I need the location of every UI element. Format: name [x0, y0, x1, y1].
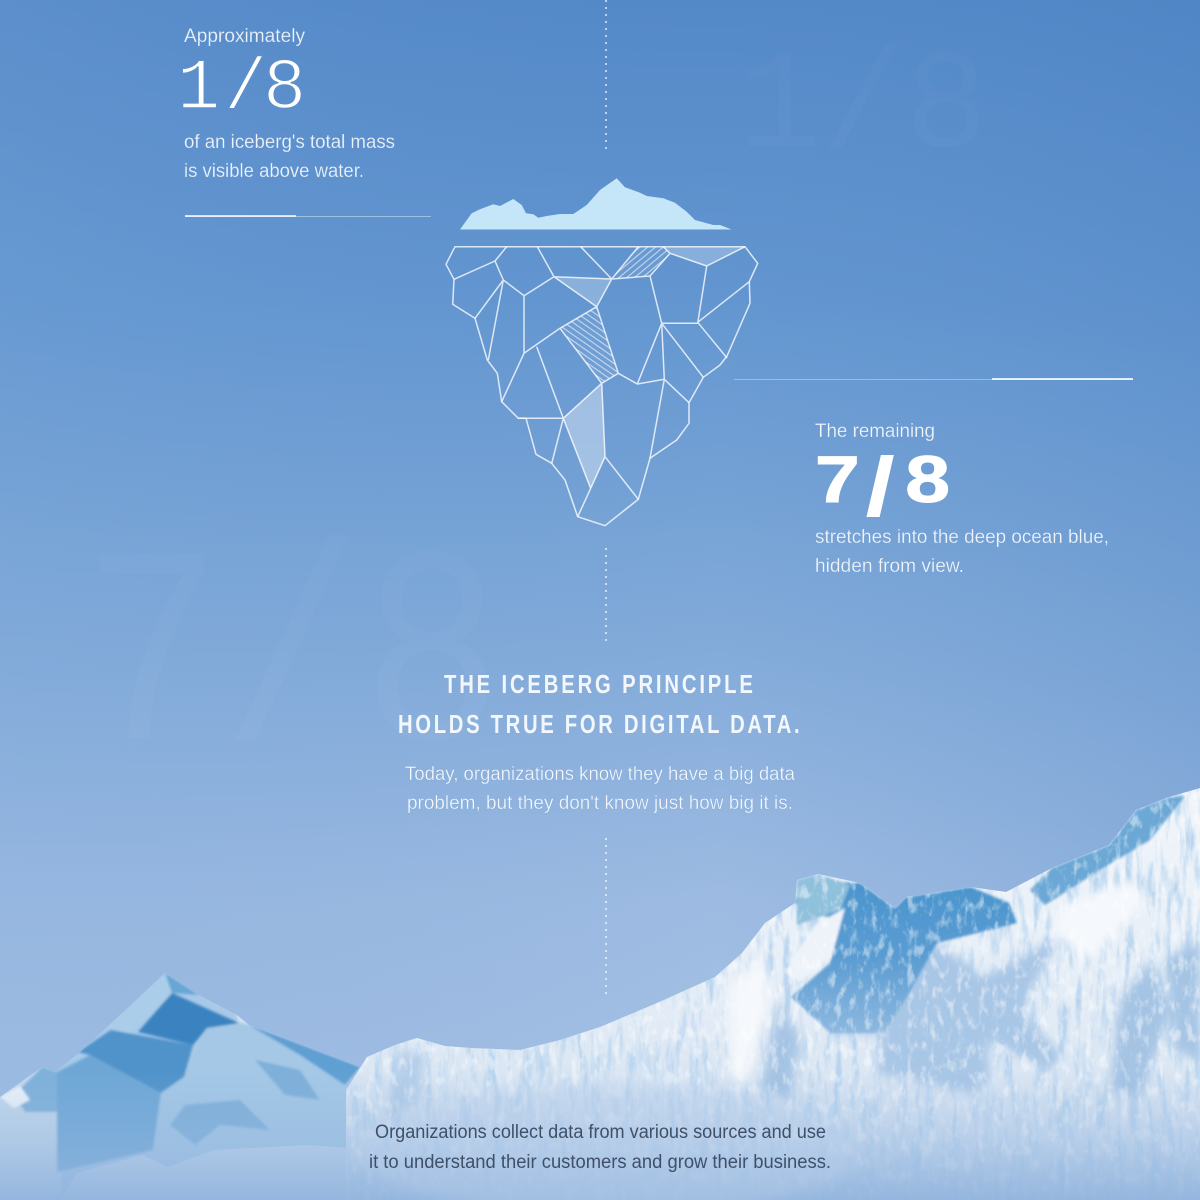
shaded facets [554, 247, 745, 488]
iceberg tip above water [460, 178, 732, 230]
dotted connector: top [605, 0, 607, 150]
rule: left callout [185, 215, 431, 217]
text block: seven eighths below water: stretches into the deep ocean blue, [815, 527, 1109, 548]
caption: it to understand their customers and grow their business. [369, 1152, 831, 1173]
numeral: 7/8: / [866, 441, 894, 533]
intro text [405, 764, 795, 814]
intro text: Today, organizations know they have a big data [405, 764, 795, 785]
text block: one eighth above water [177, 26, 395, 182]
caption [369, 1122, 831, 1173]
heading: HOLDS TRUE FOR DIGITAL DATA. [398, 710, 800, 739]
submerged wireframe [446, 247, 758, 526]
caption: Organizations collect data from various sources and use [375, 1122, 826, 1143]
text block: one eighth above water: of an iceberg's total mass [184, 132, 395, 153]
text block: one eighth above water: Approximately [184, 26, 305, 47]
right iceberg photo illustration [340, 780, 1200, 1200]
numeral: 1/8: 1/8 [177, 48, 306, 130]
text block: seven eighths below water [815, 421, 1109, 577]
dotted connector: bottom [605, 838, 607, 996]
heading: THE ICEBERG PRINCIPLE [444, 670, 753, 699]
ice streak texture [350, 788, 1200, 1166]
ghost numeral: 7/8: 7/8 [82, 506, 502, 823]
iceberg diagram [446, 178, 758, 526]
text block: one eighth above water: is visible above water. [184, 161, 364, 182]
soft mist patch behind caption [360, 1085, 860, 1200]
numeral: 7/8: 7 [815, 442, 860, 516]
bottom mist fade [0, 1070, 1200, 1200]
ghost numeral: 1/8: 1/8 [738, 30, 988, 189]
text block: seven eighths below water: hidden from view. [815, 556, 964, 577]
numeral: 7/8: 8 [905, 442, 950, 516]
foreground snow ledge [77, 1145, 346, 1174]
rule: right callout [734, 378, 1133, 380]
left iceberg photo illustration [0, 973, 360, 1185]
text block: seven eighths below water: The remaining [815, 421, 935, 442]
heading [398, 670, 800, 739]
dotted connector: middle [605, 548, 607, 646]
ice speck texture [340, 780, 1200, 1200]
intro text: problem, but they don't know just how big it is. [407, 793, 793, 814]
